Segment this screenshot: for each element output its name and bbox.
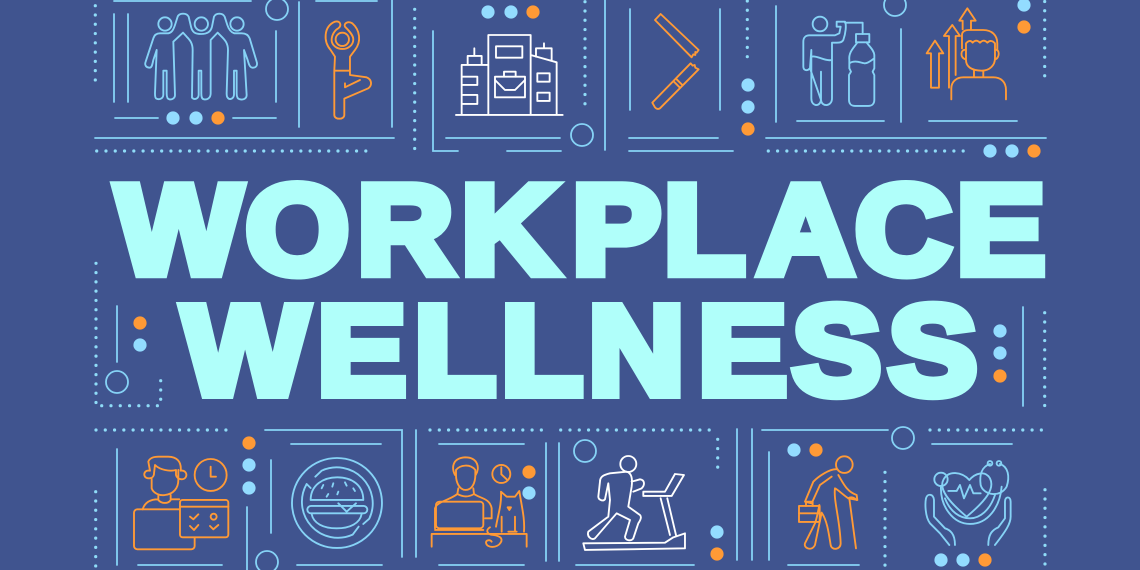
icon: yoga tree pose: [326, 22, 371, 119]
icon: heart with stethoscope in hands: [925, 461, 1011, 545]
icon: person with growth arrows: [927, 8, 1006, 99]
accent dots: [133, 0, 1041, 567]
icon: runner on treadmill: [583, 456, 685, 550]
icon: broken cigarette: [652, 14, 699, 109]
icon: elderly man with cane and briefcase: [799, 456, 857, 549]
title: Workplace Wellness: WELLNESS: [182, 281, 977, 421]
icon: no burger sign: [292, 458, 382, 548]
title: Workplace Wellness: WORKPLACE: [116, 160, 1045, 301]
title: Workplace Wellness: [116, 160, 1045, 421]
icon: office buildings with briefcase: [456, 35, 563, 115]
icon: person at laptop with schedule and clock: [134, 457, 228, 549]
icon: team with raised hands: [145, 14, 257, 100]
icon: person with water bottle: [803, 17, 874, 106]
icon: person at laptop with cat: [432, 457, 527, 547]
